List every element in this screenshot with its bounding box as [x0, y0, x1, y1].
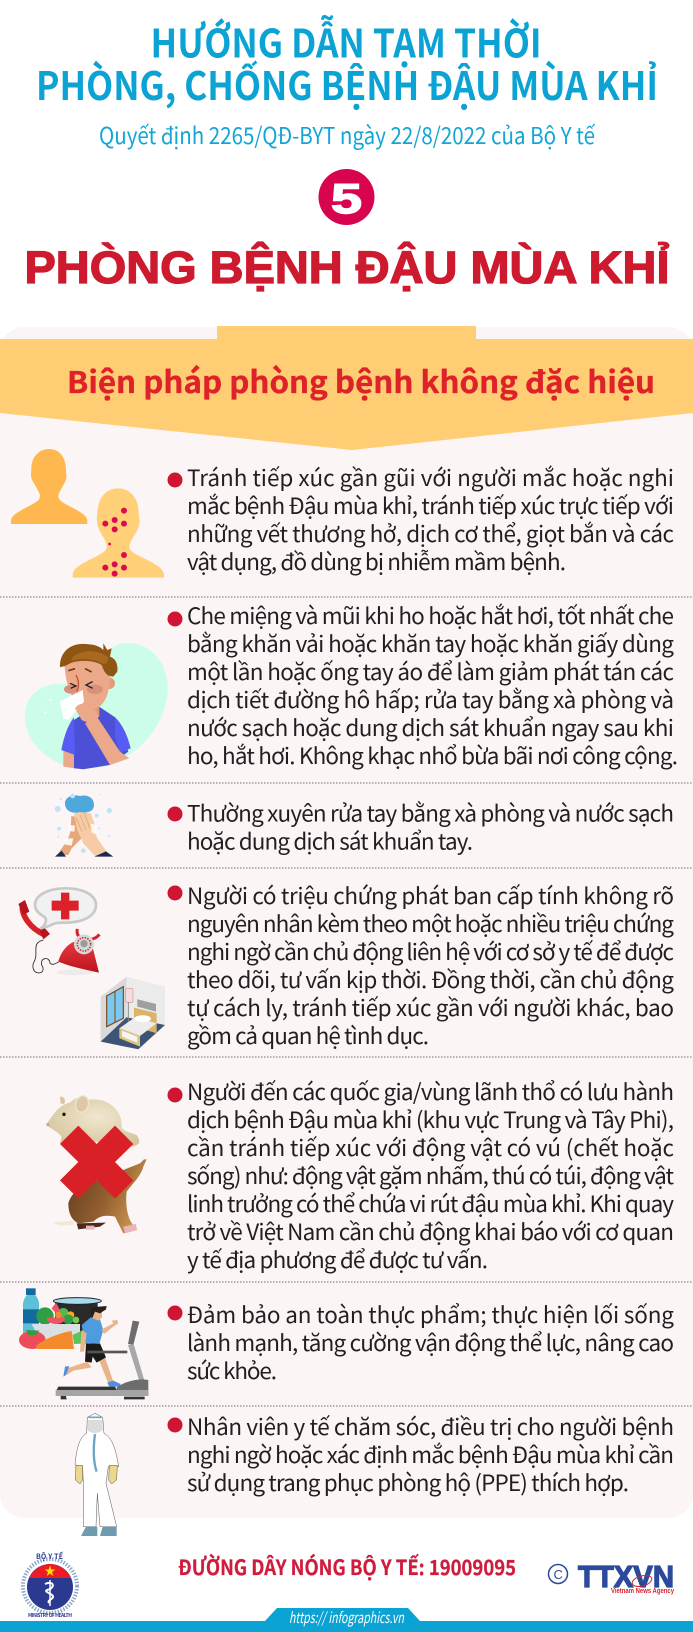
panel background	[0, 327, 693, 1518]
item 1: những vết thương hở, dịch cơ thể, giọt bắn và các	[187, 517, 674, 549]
icon: health worker in PPE	[75, 1413, 119, 1536]
suit	[75, 1413, 119, 1527]
item 4: nghi ngờ cần chủ động liên hệ với cơ sở y tế để được	[187, 935, 674, 967]
item 1: vật dụng, đồ dùng bị nhiễm mầm bệnh.	[187, 545, 566, 577]
icon: boy sneezing	[25, 643, 168, 769]
phone body	[58, 941, 99, 973]
item 6: lành mạnh, tăng cường vận động thể lực, nâng cao	[187, 1326, 674, 1358]
banner heading: Biện pháp phòng bệnh không đặc hiệu	[67, 358, 655, 402]
item 3: hoặc dung dịch sát khuẩn tay.	[187, 824, 473, 856]
website url: https:// infographics.vn	[289, 1607, 405, 1628]
cuffs	[55, 851, 113, 857]
item 2: ho, hắt hơi. Không khạc nhổ bừa bãi nơi công cộng.	[187, 739, 678, 771]
yellow header banner	[0, 326, 693, 450]
item 4	[168, 879, 674, 1051]
item 6: sức khỏe.	[187, 1354, 277, 1386]
icon: telephone and medical speech bubble	[18, 888, 99, 975]
item 5	[168, 1075, 675, 1275]
item 1: mắc bệnh Đậu mùa khỉ, tránh tiếp xúc trực tiếp với	[187, 489, 674, 521]
copyright symbol: C	[554, 1567, 563, 1582]
logo: TTXVN: Vietnam News Agency	[611, 1586, 675, 1595]
bullet	[168, 472, 182, 488]
item 4: tự cách ly, tránh tiếp xúc gần với người khác, bao	[187, 991, 674, 1023]
item 4: nguyên nhân kèm theo một hoặc nhiều triệu chứng	[187, 907, 674, 939]
icon: rodents crossed out	[46, 1094, 147, 1233]
item 2: một lần hoặc ống tay áo để làm giảm phát tán các	[187, 655, 674, 687]
bubbles	[55, 794, 112, 853]
item 3: Thường xuyên rửa tay bằng xà phòng và nước sạch	[187, 796, 674, 828]
item 7: nghi ngờ hoặc xác định mắc bệnh Đậu mùa khỉ cần	[187, 1438, 674, 1470]
footer bar	[0, 1607, 693, 1632]
bed	[137, 999, 156, 1012]
item 2: dịch tiết đường hô hấp; rửa tay bằng xà phòng và	[187, 683, 674, 715]
item 3	[168, 796, 674, 856]
logo: Ministry of Health	[23, 1550, 77, 1619]
carrot	[36, 1331, 74, 1349]
person healthy	[11, 449, 87, 524]
bullet	[168, 1088, 182, 1102]
section heading: PHÒNG BỆNH ĐẬU MÙA KHỈ	[24, 242, 669, 293]
red cross	[52, 893, 79, 919]
logo: TTXVN: TTXVN	[578, 1559, 674, 1594]
dial	[74, 934, 94, 954]
panel: prevention measures	[0, 326, 693, 1536]
title: HƯỚNG DẪN TẠM THỜI	[150, 14, 542, 70]
cord	[33, 940, 59, 973]
item 5: Người đến các quốc gia/vùng lãnh thổ có lưu hành	[187, 1075, 674, 1107]
logo: Ministry of Health: MINISTRY OF HEALTH	[28, 1612, 72, 1619]
copyright symbol	[548, 1564, 568, 1584]
subtitle: Quyết định 2265/QĐ-BYT ngày 22/8/2022 của Bộ Y tế	[99, 117, 595, 151]
logo: Ministry of Health: BỘ Y TẾ	[36, 1550, 64, 1562]
runner	[63, 1306, 121, 1387]
window	[107, 987, 123, 1027]
item 5: sống) như: động vật gặm nhấm, thú có túi, động vật	[187, 1159, 675, 1191]
item 1: Tránh tiếp xúc gần gũi với người mắc hoặc nghi	[187, 461, 674, 493]
item 2: nước sạch hoặc dung dịch sát khuẩn ngay sau khi	[187, 711, 674, 743]
mint blob	[25, 643, 168, 769]
gloves	[75, 1465, 117, 1484]
icon: two people, one with rash	[11, 449, 164, 578]
bullet	[168, 1306, 182, 1320]
tomato	[19, 1331, 46, 1349]
item 5: trở về Việt Nam cần chủ động khai báo với cơ quan	[187, 1215, 674, 1247]
cooking pot	[55, 1302, 98, 1333]
hotline: ĐƯỜNG DÂY NÓNG BỘ Y TẾ: 19009095	[178, 1552, 516, 1582]
item 2	[168, 599, 678, 771]
bullet	[168, 886, 182, 900]
item 6: Đảm bảo an toàn thực phẩm; thực hiện lối sống	[187, 1298, 674, 1330]
item 1	[168, 461, 674, 577]
red cross mark	[60, 1126, 133, 1199]
icon: isolation room	[101, 977, 165, 1049]
left hand	[57, 816, 83, 855]
item 4: theo dõi, tư vấn kịp thời. Đồng thời, cần chủ động	[187, 963, 674, 995]
visor	[87, 1420, 103, 1433]
item 6	[168, 1298, 674, 1386]
item 7	[168, 1410, 674, 1498]
rash spots	[102, 508, 127, 577]
item 5: dịch bệnh Đậu mùa khỉ (khu vực Trung và Tây Phi),	[187, 1103, 674, 1135]
item 4: gồm cả quan hệ tình dục.	[187, 1019, 429, 1051]
foam	[65, 823, 97, 846]
bullet	[168, 1418, 182, 1432]
bullet	[168, 806, 182, 822]
water bottle	[23, 1295, 39, 1335]
treadmill	[56, 1321, 148, 1399]
handset	[22, 904, 45, 935]
bullet	[168, 612, 182, 626]
title	[36, 14, 658, 112]
person with rash	[73, 488, 164, 578]
number badge 5: 5	[331, 175, 362, 222]
icon: healthy food and treadmill runner	[19, 1288, 148, 1399]
IV stand	[127, 997, 130, 1027]
sponge	[65, 795, 94, 813]
brown rodent	[68, 1159, 147, 1233]
right hand	[74, 812, 108, 856]
item 2: Che miệng và mũi khi ho hoặc hắt hơi, tốt nhất che	[187, 599, 674, 631]
bowl of vegetables	[32, 1303, 80, 1340]
speech bubble	[35, 888, 96, 928]
boots	[81, 1527, 117, 1536]
item 2: bằng khăn vải hoặc khăn tay hoặc khăn giấy dùng	[187, 627, 674, 659]
item 7: sử dụng trang phục phòng hộ (PPE) thích hợp.	[187, 1466, 629, 1498]
item 5: cần tránh tiếp xúc với động vật có vú (chết hoặc	[187, 1131, 674, 1163]
icon: washing hands	[55, 794, 113, 857]
item 5: linh trưởng có thể chứa vi rút đậu mùa khỉ. Khi quay	[187, 1187, 674, 1219]
item 4: Người có triệu chứng phát ban cấp tính không rõ	[187, 879, 674, 911]
cream rat	[47, 1097, 139, 1147]
number badge 5	[318, 169, 374, 225]
zipper	[94, 1434, 97, 1472]
item 7: Nhân viên y tế chăm sóc, điều trị cho người bệnh	[187, 1410, 674, 1442]
item 5: y tế địa phương để được tư vấn.	[187, 1243, 488, 1275]
